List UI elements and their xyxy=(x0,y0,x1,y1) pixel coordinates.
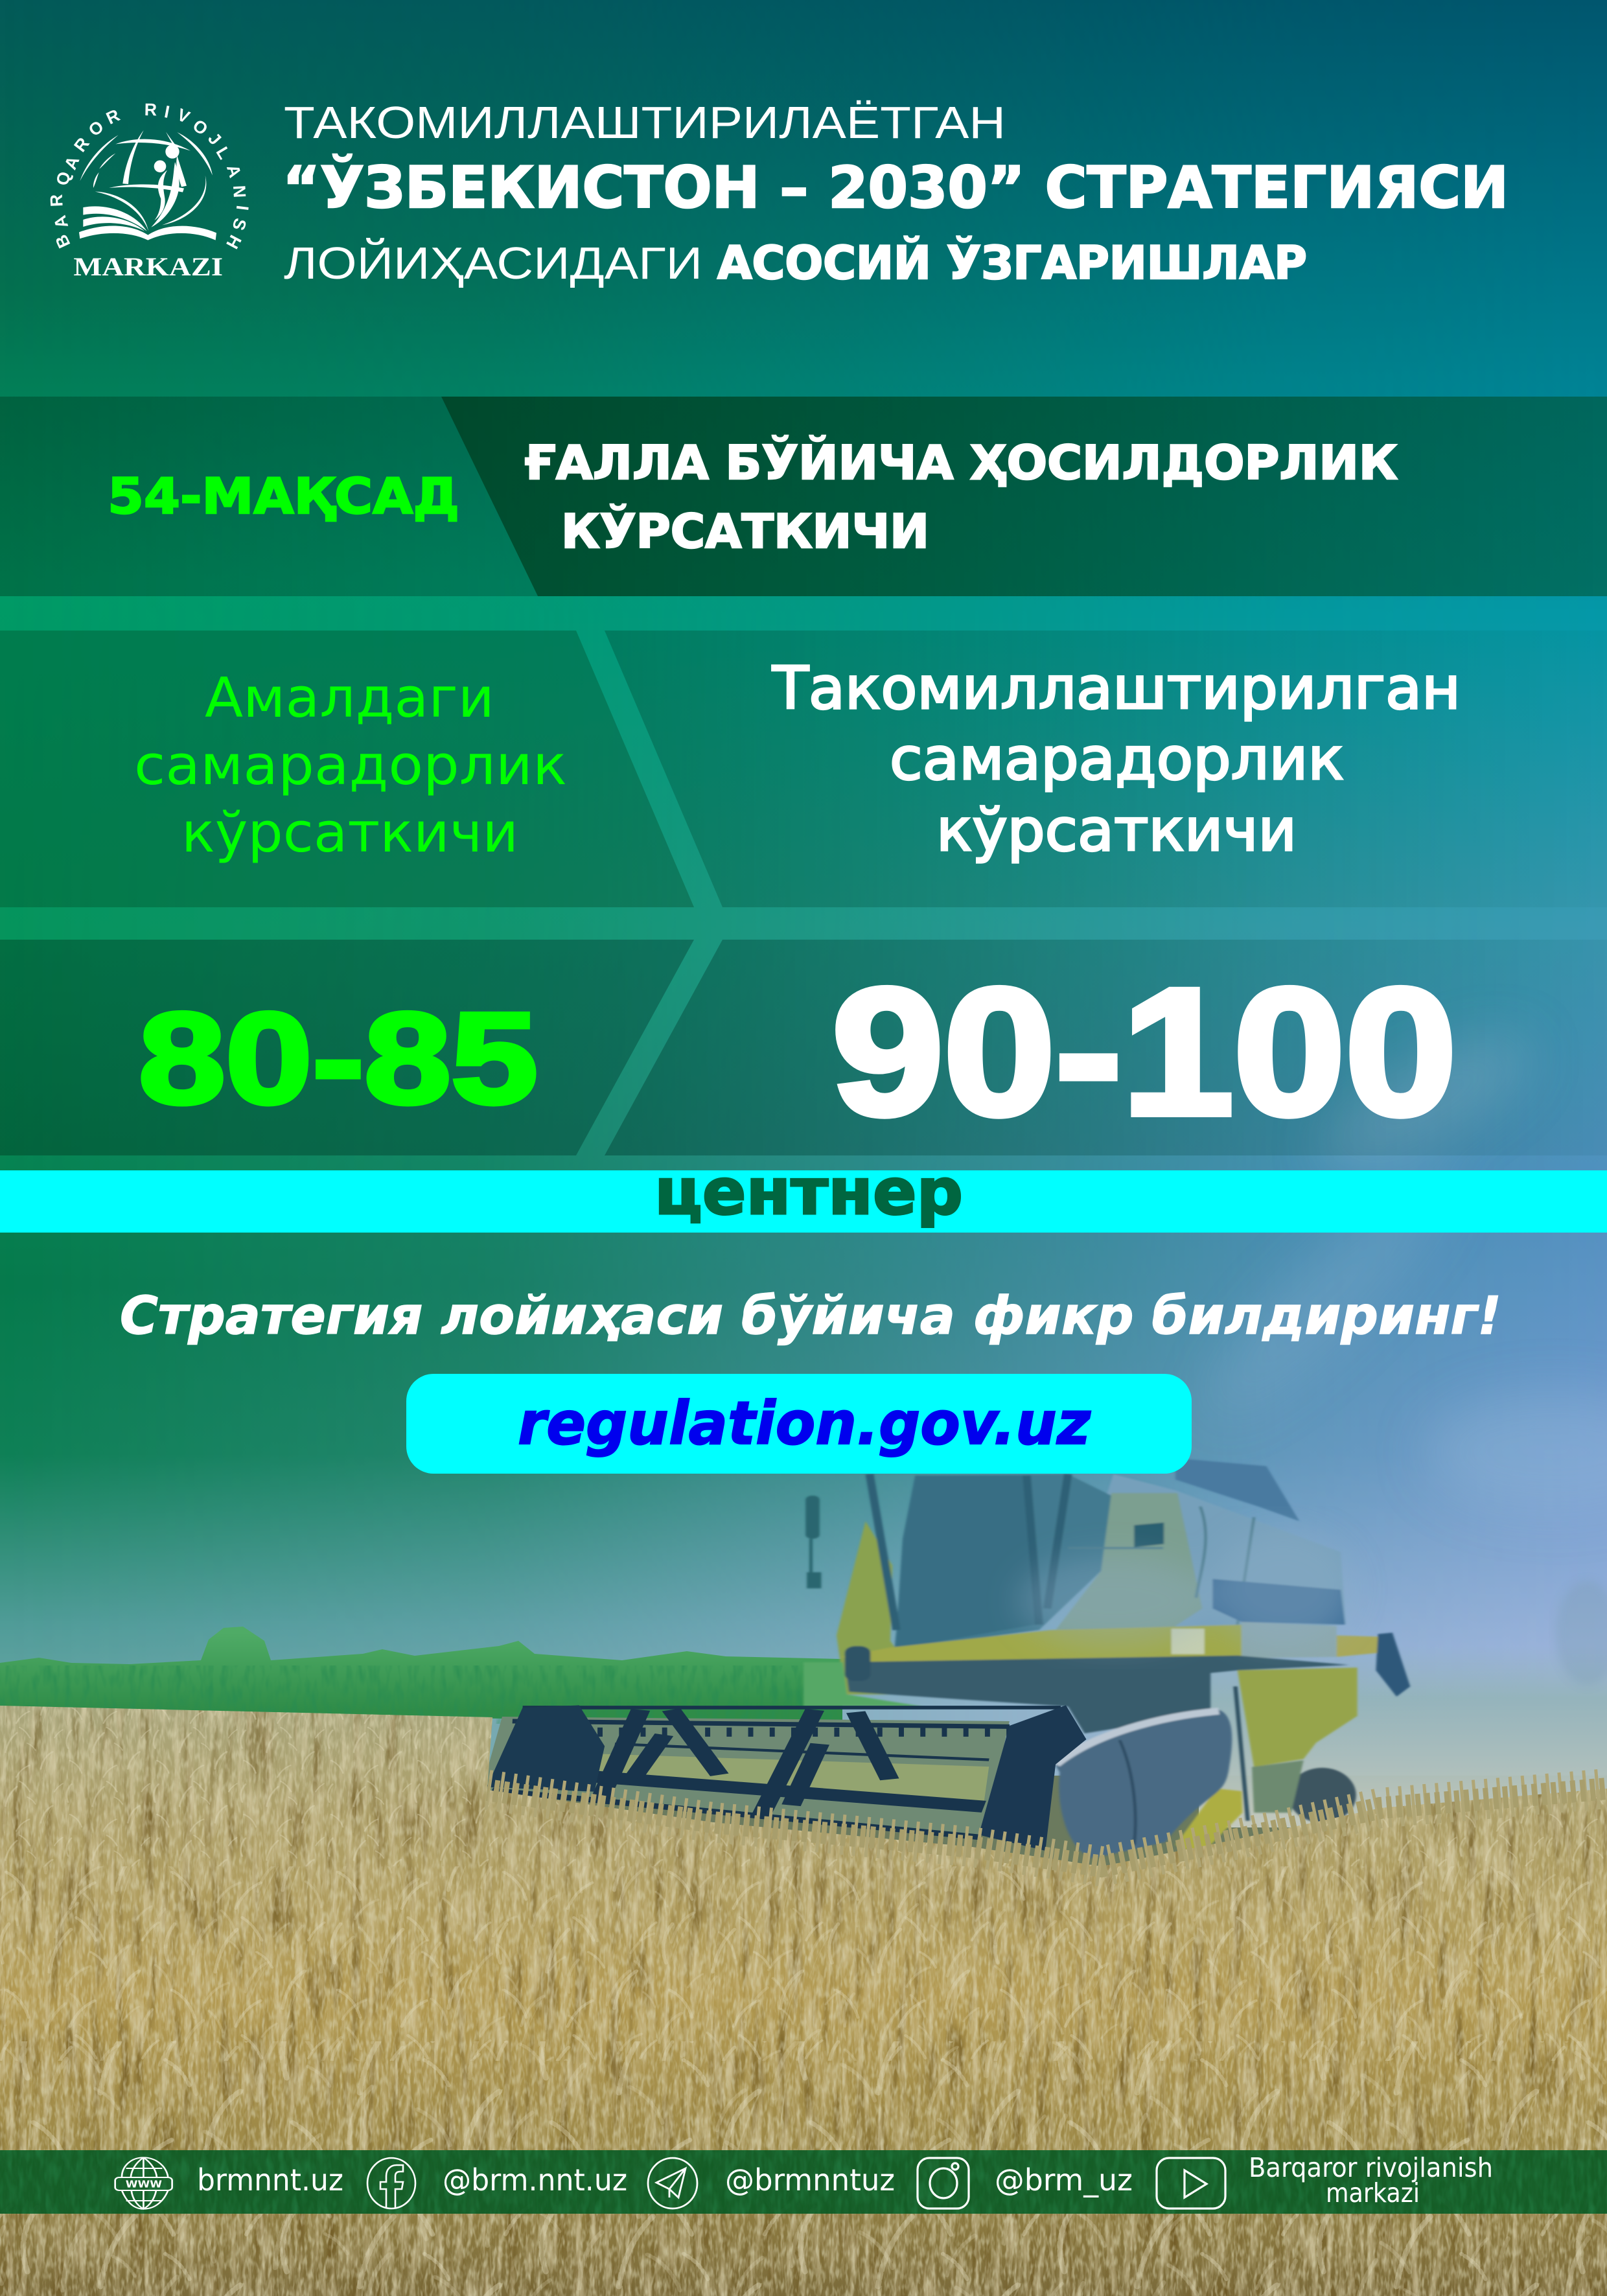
cab pale side xyxy=(1056,1493,1202,1630)
title line 3: АСОСИЙ ЎЗГАРИШЛАР xyxy=(717,237,1307,290)
goal title xyxy=(524,435,1398,559)
improved indicator text xyxy=(772,655,1461,864)
icon: website globe: WWW xyxy=(126,2179,162,2190)
unloading tube xyxy=(1242,1622,1337,1658)
improved indicator text: самарадорлик xyxy=(890,725,1344,793)
treeline xyxy=(0,1581,1607,1724)
logo: Barqaror Rivojlanish Markazi xyxy=(47,97,252,281)
instagram label: @brm_uz xyxy=(995,2163,1133,2197)
shield yellow corner xyxy=(1175,1789,1242,1855)
value 90-100: 90-100 xyxy=(832,951,1457,1152)
telegram label: @brmnntuz xyxy=(725,2163,895,2197)
yellow band xyxy=(840,1625,1242,1663)
cabin glass xyxy=(894,1474,1111,1649)
unit label: центнер xyxy=(654,1155,963,1229)
title line 3: ЛОЙИҲАСИДАГИ xyxy=(284,237,702,288)
goal title: КЎРСАТКИЧИ xyxy=(561,504,929,559)
mirror post xyxy=(805,1496,821,1588)
logo emblem: book, globe and figures xyxy=(79,130,216,240)
wheat field xyxy=(0,1698,1607,2296)
panel: current value xyxy=(0,940,694,1155)
website address: regulation.gov.uz xyxy=(518,1389,1091,1458)
panel: improved indicator label xyxy=(605,631,1607,907)
panel: improved value xyxy=(605,940,1607,1155)
title line 1: ТАКОМИЛЛАШТИРИЛАЁТГАН xyxy=(284,97,1006,148)
wheat tufts along harvester front edge xyxy=(487,1789,1607,1866)
panel: goal header, left xyxy=(0,397,538,596)
improved indicator text: кўрсаткичи xyxy=(936,796,1297,864)
canopy xyxy=(1175,1458,1299,1521)
logo figure child xyxy=(154,160,166,172)
logo figure adult xyxy=(165,145,179,159)
icon: youtube xyxy=(1157,2158,1225,2209)
footer band with contacts xyxy=(0,2150,1607,2214)
icon: facebook xyxy=(367,2158,415,2209)
icon: website globe xyxy=(115,2157,172,2209)
yellow left column xyxy=(837,1521,927,1695)
icon: telegram xyxy=(648,2158,697,2209)
call to action text: Стратегия лойиҳаси бўйича фикр билдиринг! xyxy=(120,1286,1501,1346)
organisation name: markazi xyxy=(1326,2177,1420,2209)
website pill xyxy=(406,1374,1192,1474)
mirror box xyxy=(1134,1522,1164,1548)
dark lower body xyxy=(845,1656,1349,1734)
fog over harvester cab xyxy=(1017,1529,1354,1646)
panel: current indicator label xyxy=(0,631,694,907)
right lower yellow panel xyxy=(1238,1667,1358,1767)
icon: instagram xyxy=(918,2158,969,2209)
current indicator text: самарадорлик xyxy=(134,734,567,798)
title line 2: “ЎЗБЕКИСТОН – 2030” СТРАТЕГИЯСИ xyxy=(283,154,1509,221)
combine harvester xyxy=(804,1458,1410,1859)
current indicator text: кўрсаткичи xyxy=(181,801,518,865)
organisation name: Barqaror rivojlanish xyxy=(1249,2152,1493,2183)
current indicator text xyxy=(134,666,567,865)
unit strip xyxy=(0,1155,1607,1233)
header reel and frames xyxy=(481,1705,1086,1851)
panel: goal header, right xyxy=(441,397,1607,596)
value 80-85: 80-85 xyxy=(139,986,538,1131)
website label: brmnnt.uz xyxy=(197,2163,343,2197)
improved indicator text: Такомиллаштирилган xyxy=(772,655,1461,723)
grain shield xyxy=(1054,1710,1232,1859)
sky with gradient overlay xyxy=(0,0,1607,1815)
foreground green xyxy=(804,1662,923,1706)
organisation name xyxy=(1249,2152,1493,2209)
goal label: 54-МАҚСАД xyxy=(108,467,459,525)
current indicator text: Амалдаги xyxy=(205,666,494,730)
upper body xyxy=(1101,1474,1346,1630)
spout xyxy=(1376,1632,1410,1697)
goal title: ҒАЛЛА БЎЙИЧА ҲОСИЛДОРЛИК xyxy=(524,435,1398,490)
rear wheel xyxy=(1288,1768,1356,1822)
logo wordmark: MARKAZI xyxy=(73,252,223,281)
dark engine box xyxy=(1212,1579,1345,1625)
distant dust right of harvester xyxy=(1199,1646,1607,1827)
ground under harvester xyxy=(0,1776,1607,1944)
logo ring text: BARQAROR RIVOJLANISH xyxy=(47,97,252,252)
facebook label: @brm.nnt.uz xyxy=(443,2163,627,2197)
title line 3 xyxy=(284,237,1307,290)
title block xyxy=(283,97,1509,290)
